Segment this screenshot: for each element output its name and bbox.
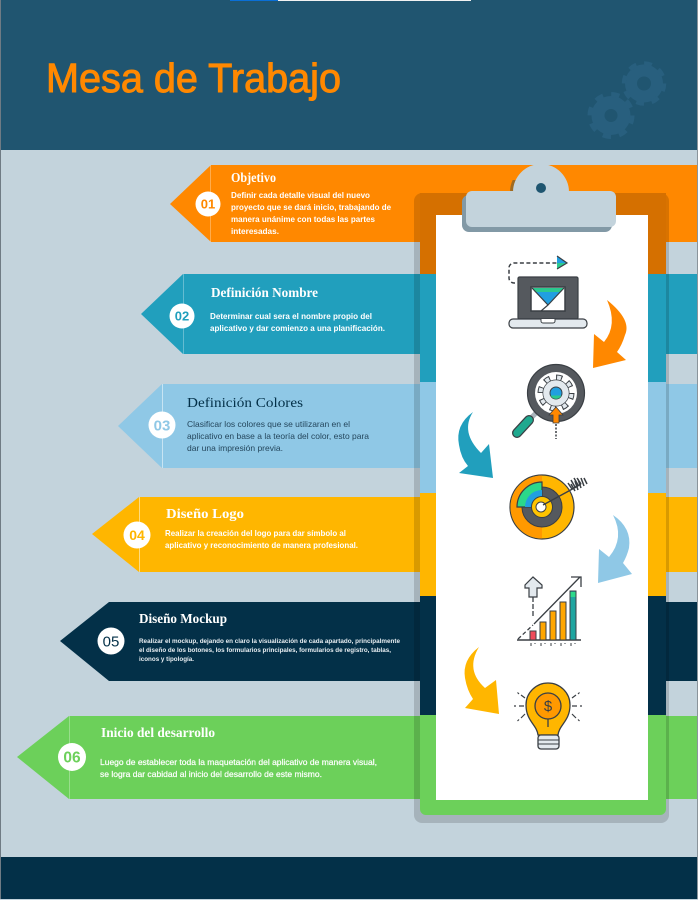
panel: step 05 diseno mockup xyxy=(60,602,698,681)
panel: step 05 diseno mockup: el diseño de los botones, los formularios principales, formularios de registro, tablas, xyxy=(139,647,391,654)
panel: step 05 diseno mockup: iconos y tipología. xyxy=(139,656,194,663)
panel: step 06 inicio del desarrollo: se logra dar cabidad al inicio del desarrollo de este mismo. xyxy=(100,769,322,779)
panel: step 04 diseno logo: 04 xyxy=(129,527,145,543)
arrow: teal xyxy=(458,412,493,478)
panel: step 03 definicion colores: dar una impresión previa. xyxy=(187,443,283,453)
panel: step 01 objetivo: 01 xyxy=(201,196,215,212)
panel: step 02 definicion nombre: 02 xyxy=(175,308,189,324)
panel: step 01 objetivo xyxy=(170,165,698,242)
icon: growth chart xyxy=(517,577,581,646)
header band xyxy=(0,0,698,150)
panel: step 05 diseno mockup: Diseño Mockup xyxy=(139,612,227,627)
icon: light bulb xyxy=(514,683,582,749)
panel: step 04 diseno logo: Realizar la creación del logo para dar símbolo al xyxy=(165,528,346,538)
icon: magnifier with gear xyxy=(517,364,584,439)
icon: gears xyxy=(590,64,664,136)
panel: step 04 diseno logo: aplicativo y reconocimiento de manera profesional. xyxy=(165,540,358,550)
panel: step 02 definicion nombre: aplicativo y dar comienzo a una planificación. xyxy=(210,323,385,333)
panel: step 02 definicion nombre: Definición Nombre xyxy=(211,286,318,301)
panel: step 03 definicion colores xyxy=(118,384,698,468)
panel: step 05 diseno mockup: Realizar el mockup, dejando en claro la visualización de cada apartado, principalmente xyxy=(139,638,400,645)
panel: step 04 diseno logo: Diseño Logo xyxy=(166,507,244,522)
arrow: yellow xyxy=(465,647,499,714)
title: Mesa de Trabajo xyxy=(46,55,341,101)
panel: step 04 diseno logo xyxy=(92,497,698,572)
arrow: orange xyxy=(593,300,627,368)
panel: step 06 inicio del desarrollo xyxy=(17,716,698,799)
panel: step 02 definicion nombre: Determinar cual sera el nombre propio del xyxy=(210,311,372,321)
panel: step 03 definicion colores: Clasificar los colores que se utilizaran en el xyxy=(187,419,350,429)
panel: step 01 objetivo: Definir cada detalle visual del nuevo xyxy=(231,190,370,200)
panel: step 03 definicion colores: 03 xyxy=(154,418,170,434)
panel: step 01 objetivo: manera unánime con todas las partes xyxy=(231,214,375,224)
panel: step 06 inicio del desarrollo: Luego de establecer toda la maquetación del aplicativo de manera visual, xyxy=(100,757,377,767)
panel: step 05 diseno mockup: 05 xyxy=(103,634,119,650)
icon: light bulb: $ xyxy=(544,698,553,715)
clip xyxy=(462,164,616,232)
panel: step 06 inicio del desarrollo: Inicio del desarrollo xyxy=(101,726,215,741)
panel: step 03 definicion colores: aplicativo en base a la teoría del color, esto para xyxy=(187,431,369,441)
panel: step 01 objetivo: interesadas. xyxy=(231,226,279,236)
panel: step 02 definicion nombre xyxy=(141,274,698,354)
panel: step 03 definicion colores: Definición Colores xyxy=(187,396,303,411)
clipboard xyxy=(414,164,669,823)
footer band xyxy=(0,857,698,899)
panel: step 01 objetivo: proyecto que se dará inicio, trabajando de xyxy=(231,202,391,212)
panel: step 01 objetivo: Objetivo xyxy=(231,171,276,186)
panel: step 06 inicio del desarrollo: 06 xyxy=(63,750,81,766)
arrow: light blue xyxy=(598,515,632,583)
icon: laptop with envelope xyxy=(509,256,587,328)
icon: target with arrow xyxy=(510,475,587,539)
